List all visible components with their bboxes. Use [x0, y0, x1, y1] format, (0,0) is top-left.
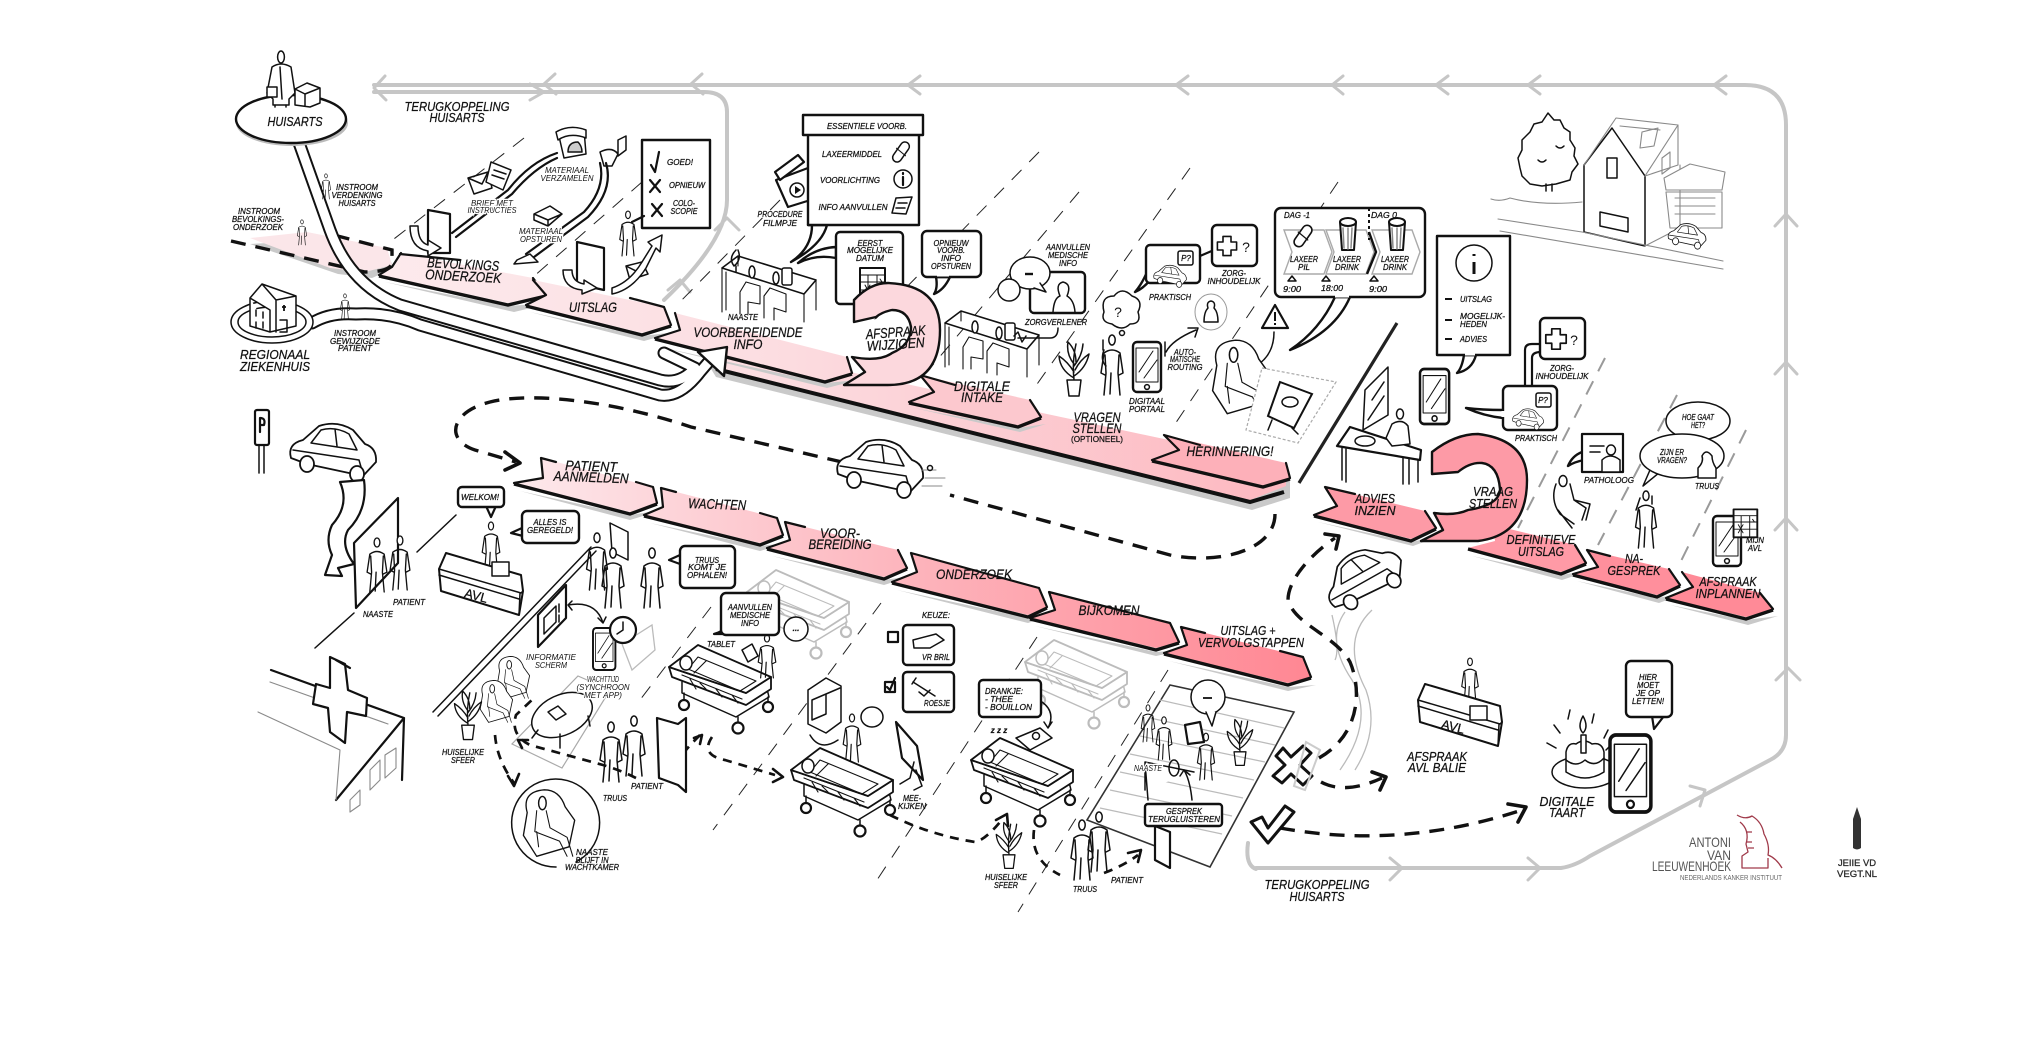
step: bevolkingsonderzoek: [379, 253, 552, 312]
icon: door 2: [577, 242, 604, 290]
feedback loop line: [374, 74, 1800, 880]
laxeer schedule box: DRINK: [1383, 263, 1408, 272]
arrow into door: [410, 226, 441, 256]
icon: tree: [1518, 113, 1578, 191]
bubble: eerst mogelijke datum: MOGELIJKE: [847, 246, 894, 255]
terugkoppeling huisarts bottom: TERUGKOPPELING: [1264, 877, 1370, 892]
route roads from huisarts and ziekenhuis: [298, 140, 727, 395]
instroom labels: INSTROOM: [336, 183, 378, 192]
icon: hospital building: [250, 284, 296, 332]
scene labels bevolking: MATERIAAL: [519, 227, 563, 236]
step: na-gesprek: NA-: [1625, 551, 1644, 566]
bubble: drankje: [979, 680, 1052, 728]
regionaal ziekenhuis node: [231, 284, 313, 374]
truus and patient to room: PATIENT: [1111, 876, 1144, 885]
automatische routing: [1161, 294, 1227, 372]
essentiele voorbereiding box: [791, 115, 923, 262]
automatische routing: AUTO-: [1173, 348, 1196, 357]
plant huiselijke sfeer: SFEER: [994, 881, 1018, 890]
digitaal portaal phone: [1129, 342, 1165, 414]
step: bijkomen: [1030, 592, 1184, 656]
person with phone, bubbles, truus: HET?: [1691, 421, 1705, 430]
instroom labels: GEWIJZIGDE: [330, 337, 381, 346]
step: afspraak wijzigen loop arrow: WIJZIGEN: [866, 334, 926, 354]
praktisch and zorginhoudelijk boxes: ZORG-: [1221, 269, 1246, 278]
hospital building with cross: [258, 657, 404, 812]
scene labels bevolking: BRIEF MET: [471, 199, 514, 208]
naaste in wachtkamer circle: BLIJFT IN: [576, 856, 609, 865]
keuze vr bril / roesje: ROESJE: [924, 699, 951, 708]
heading: terugkoppeling huisarts top: [404, 99, 510, 125]
bubble: alles is geregeld: ALLES IS: [533, 518, 567, 527]
praktisch and zorginhoudelijk boxes: INHOUDELIJK: [1208, 277, 1261, 286]
step: afspraak wijzigen loop arrow: [844, 283, 940, 385]
digitale intake scene: AANVULLEN: [1045, 243, 1090, 252]
greeting people at door: [587, 523, 663, 608]
step: afspraak inplannen: [1666, 572, 1778, 625]
door to treatment: [657, 718, 686, 792]
person with phone and question: [1101, 291, 1140, 395]
meekijken monitor: MEE-: [903, 794, 921, 803]
person with phone and question: ?: [1114, 304, 1122, 320]
icon: envelope and letter: [468, 172, 492, 194]
step: advies inzien: [1314, 487, 1440, 546]
x and checkmark decisions: [1251, 742, 1320, 843]
step: na-gesprek: GESPREK: [1608, 563, 1662, 578]
praktisch and zorginhoudelijk boxes: PRAKTISCH: [1149, 293, 1191, 302]
essentiele voorbereiding box: ESSENTIELE VOORB.: [827, 122, 907, 131]
bed with nurse and tablet: [669, 593, 808, 734]
naaste in wachtkamer circle: NAASTE: [576, 848, 609, 857]
truus and patient walking: [600, 716, 664, 803]
instroom labels: VERDENKING: [332, 191, 382, 200]
bubble: welkom: [458, 487, 504, 517]
info phone and box: UITSLAG: [1460, 295, 1492, 304]
bubble: eerst mogelijke datum: DATUM: [856, 254, 884, 263]
icon: garage: [1664, 164, 1725, 228]
bubble: truus komt je ophalen: TRUUS: [695, 556, 720, 565]
laxeer schedule box: DRINK: [1335, 263, 1360, 272]
laxeer schedule box: 9:00: [1369, 285, 1388, 294]
step: herinnering: [1152, 435, 1290, 487]
naaste at table scene: NAASTE: [728, 313, 759, 322]
truus and patient to room: TRUUS: [1073, 885, 1098, 894]
essentiele voorbereiding box: VOORLICHTING: [820, 176, 880, 185]
heading: terugkoppeling huisarts top: HUISARTS: [430, 110, 485, 125]
instroom labels: INSTROOM: [334, 329, 376, 338]
bubble: opnieuw voorb info opsturen: INFO: [941, 254, 961, 263]
scene labels bevolking: SCOPIE: [670, 207, 698, 216]
process band 2: visit day: [514, 457, 1316, 691]
home desk with person: [1337, 367, 1421, 484]
praktisch and zorginhoudelijk boxes: P?: [1181, 254, 1191, 263]
person with phone, bubbles, truus: ZIJN ER: [1659, 448, 1684, 457]
scene labels bevolking: MATERIAAL: [545, 166, 589, 175]
bubble: truus komt je ophalen: OPHALEN!: [687, 571, 728, 580]
entrance glass door and people: PATIENT: [393, 598, 426, 607]
recovery bed with tray: z z z: [990, 726, 1007, 735]
digitale intake scene: ZORGVERLENER: [1024, 318, 1087, 327]
keuze vr bril / roesje: KEUZE:: [922, 611, 950, 620]
bevolkingsonderzoek scene: [410, 127, 710, 294]
laxeer schedule box: LAXEER: [1290, 255, 1318, 264]
naaste in wachtkamer circle: [512, 779, 619, 872]
scene labels bevolking: GOED!: [667, 158, 694, 167]
pathologist screen and patient: [1554, 434, 1634, 528]
step: voorbereiding: VOOR-: [820, 525, 860, 541]
truus and patient to room: [1071, 812, 1144, 894]
step: na-gesprek: [1573, 550, 1686, 603]
wachttijd phone and clock: [576, 617, 655, 700]
driving car top: [837, 440, 945, 498]
plant huiselijke sfeer: HUISELIJKE: [985, 873, 1028, 882]
step: voorbereiding: BEREIDING: [808, 536, 872, 552]
scene labels bevolking: OPSTUREN: [520, 235, 562, 244]
info phone and box: HEDEN: [1460, 320, 1487, 329]
bubble: hier moet je op letten: HIER: [1639, 673, 1657, 682]
icon: info: [894, 170, 912, 188]
treatment room machine, doctor, bed: [791, 678, 895, 836]
dashed walking routes: [495, 698, 783, 786]
consult door and sign: TERUGLUISTEREN: [1148, 815, 1220, 824]
house with tree and garage: [1491, 113, 1725, 269]
step: uitslag en vervolgstappen: [1164, 623, 1316, 691]
curved route letter to jar: [452, 153, 557, 237]
bubble: drankje: - BOUILLON: [985, 703, 1032, 712]
step: vragen stellen: VRAGEN: [1074, 409, 1121, 425]
step: vragen stellen: STELLEN: [1072, 420, 1122, 436]
bed with nurse and tablet: INFO: [741, 619, 759, 628]
bubble: drankje: DRANKJE:: [985, 687, 1023, 696]
icon: form: [892, 197, 912, 214]
logo jelle vd vegt pencil: VEGT.NL: [1837, 869, 1877, 879]
recovery bed with tray: [971, 726, 1075, 826]
laxeer schedule box: DAG 0: [1371, 211, 1398, 220]
step: voorbereidende info: [655, 313, 858, 388]
info phone and box: ADVIES: [1459, 335, 1488, 344]
meekijken monitor: KIJKEN: [898, 802, 926, 811]
icon: sample jar: [556, 127, 586, 158]
digitale taart cake: TAART: [1549, 805, 1586, 820]
huisarts node: [236, 51, 348, 146]
afspraak avl balie: AVL: [1440, 717, 1466, 737]
step: patient aanmelden: AANMELDEN: [553, 468, 630, 486]
zorg and praktisch boxes right: ?: [1570, 332, 1578, 348]
step: vragen stellen: (OPTIONEEL): [1071, 435, 1123, 444]
avl balie reception: [439, 522, 523, 615]
naaste at table scene: [722, 250, 816, 322]
regionaal ziekenhuis node: ZIEKENHUIS: [239, 359, 310, 374]
keuze vr bril / roesje: VR BRIL: [922, 653, 950, 662]
zorg and praktisch boxes right: INHOUDELIJK: [1536, 372, 1589, 381]
step: voorbereidende info: VOORBEREIDENDE: [694, 324, 803, 340]
icon: doctor: [267, 51, 295, 107]
logo antoni van leeuwenhoek: [1652, 815, 1783, 882]
plant: [1059, 342, 1089, 396]
digitale intake scene: MEDISCHE: [1048, 251, 1089, 260]
step: patient aanmelden: [514, 457, 662, 520]
meekijken monitor: [896, 722, 926, 811]
step: bevolkingsonderzoek: ONDERZOEK: [425, 266, 502, 286]
wavy entrance arrow: [325, 480, 365, 576]
laxeer schedule box: 18:00: [1321, 284, 1344, 293]
digitale taart cake: DIGITALE: [1540, 794, 1595, 809]
truus and patient walking: TRUUS: [603, 794, 628, 803]
digitale taart cake: [1540, 710, 1651, 820]
info phone and box: [1420, 236, 1510, 424]
bubble: drankje: - THEE: [985, 695, 1014, 704]
icon: small house: [295, 83, 320, 107]
wachttijd phone and clock: MET APP): [584, 691, 622, 700]
zorg and praktisch boxes right: ZORG-: [1549, 364, 1574, 373]
step: afspraak inplannen: AFSPRAAK: [1699, 574, 1758, 589]
car leaving and road: [1314, 532, 1413, 770]
bubble: hier moet je op letten: JE OP: [1635, 689, 1661, 698]
icon: door 1: [428, 210, 450, 253]
step: uitslag: [526, 280, 676, 341]
procedure filmpje clapperboard: PROCEDURE: [758, 210, 803, 219]
info phone and box: MOGELIJK-: [1460, 312, 1505, 321]
essentiele voorbereiding box: INFO AANVULLEN: [818, 203, 888, 212]
laxeer schedule box: DAG -1: [1284, 211, 1310, 220]
consult room: [1087, 680, 1294, 867]
zorg and praktisch boxes right: P?: [1538, 396, 1548, 405]
laxeer schedule box: [1275, 208, 1425, 350]
step: bevolkingsonderzoek: BEVOLKINGS: [427, 254, 500, 274]
step: onderzoek: ONDERZOEK: [936, 566, 1013, 582]
bubble: eerst mogelijke datum: [798, 232, 903, 304]
step: definitieve uitslag: UITSLAG: [1518, 544, 1564, 559]
mijn avl phone and calendar: AVL: [1747, 544, 1762, 553]
thin dashed zone lines: [315, 138, 1746, 912]
mijn avl phone and calendar: MIJN: [1746, 536, 1764, 545]
step: vraag stellen loop arrow: VRAAG: [1473, 484, 1513, 499]
praktisch and zorginhoudelijk boxes: [1135, 225, 1261, 302]
afspraak avl balie: AVL BALIE: [1407, 760, 1466, 775]
bubble: opnieuw voorb info opsturen: OPNIEUW: [934, 239, 970, 248]
step: advies inzien: INZIEN: [1354, 503, 1396, 518]
step: digitale intake: DIGITALE: [954, 378, 1011, 394]
step: uitslag en vervolgstappen: VERVOLGSTAPPEN: [1198, 635, 1305, 650]
person with phone, bubbles, truus: VRAGEN?: [1657, 456, 1687, 465]
automatische routing: MATISCHE: [1170, 355, 1200, 364]
warning triangle and reminder: [1213, 305, 1288, 414]
heading: terugkoppeling huisarts top: TERUGKOPPELING: [404, 99, 510, 114]
instroom labels: [232, 174, 382, 353]
consult door and sign: GESPREK: [1166, 807, 1203, 816]
informatie scherm: [526, 585, 606, 670]
icon: toilet: [600, 136, 626, 166]
automatische routing: ROUTING: [1168, 363, 1202, 372]
bubble: welkom: WELKOM!: [461, 493, 500, 502]
consult room: NAASTE: [1134, 764, 1163, 773]
dashed car route around: [456, 398, 1275, 558]
step: definitieve uitslag: [1468, 525, 1592, 580]
zorg and praktisch boxes right: [1466, 318, 1589, 443]
instroom labels: HUISARTS: [338, 199, 376, 208]
scene labels bevolking: INSTRUCTIES: [468, 206, 517, 215]
bed with nurse and tablet: MEDISCHE: [730, 611, 771, 620]
digitale intake scene: INFO: [1059, 259, 1077, 268]
afspraak avl balie: [1406, 658, 1502, 775]
wachttijd phone and clock: (SYNCHROON: [576, 683, 630, 692]
waiting room sofa with people: HUISELIJKE: [442, 748, 485, 757]
regionaal ziekenhuis node: REGIONAAL: [240, 347, 310, 362]
person with phone, bubbles, truus: TRUUS: [1695, 482, 1720, 491]
bubble: opnieuw voorb info opsturen: VOORB.: [937, 246, 965, 255]
bubble: opnieuw voorb info opsturen: OPSTUREN: [931, 262, 971, 271]
parked car: [290, 424, 376, 482]
step: vraag stellen loop arrow: [1421, 434, 1527, 541]
bubble: truus komt je ophalen: KOMT JE: [688, 563, 727, 572]
scene labels bevolking: [468, 158, 706, 244]
laxeer schedule box: 9:00: [1283, 285, 1302, 294]
procedure filmpje clapperboard: FILMPJE: [763, 219, 798, 228]
dashed routes lower: [890, 814, 1141, 875]
bubble: hier moet je op letten: [1626, 661, 1672, 729]
entrance glass door and people: [354, 498, 426, 619]
afspraak avl balie: AFSPRAAK: [1406, 749, 1468, 764]
bed with nurse and tablet: ...: [793, 624, 799, 633]
step: herinnering: HERINNERING!: [1186, 443, 1274, 459]
step: onderzoek: [892, 553, 1052, 623]
step: afspraak wijzigen loop arrow: AFSPRAAK: [864, 322, 927, 342]
icon: house: [1584, 118, 1680, 246]
step: vraag stellen loop arrow: STELLEN: [1469, 496, 1517, 511]
mijn avl phone and calendar: [1713, 509, 1764, 566]
bed with nurse and tablet: AANVULLEN: [727, 603, 772, 612]
informatie scherm: SCHERM: [535, 661, 567, 670]
scene labels bevolking: COLO-: [673, 199, 695, 208]
step: uitslag en vervolgstappen: UITSLAG +: [1220, 623, 1276, 638]
faded beds: [747, 570, 1129, 728]
person with phone, bubbles, truus: [1636, 402, 1730, 548]
process band 3: results: [1314, 434, 1778, 625]
digitale intake scene: [945, 243, 1090, 377]
essentiele voorbereiding box: LAXEERMIDDEL: [822, 150, 882, 159]
praktisch and zorginhoudelijk boxes: ?: [1242, 239, 1250, 255]
laxeer schedule box: PIL: [1298, 263, 1310, 272]
step: afspraak inplannen: INPLANNEN: [1696, 586, 1761, 601]
bubble: opnieuw voorb info opsturen: [922, 231, 981, 294]
logo antoni van leeuwenhoek: ANTONI: [1689, 834, 1731, 850]
logo antoni van leeuwenhoek: NEDERLANDS KANKER INSTITUUT: [1680, 875, 1783, 882]
step: advies inzien: ADVIES: [1354, 491, 1395, 506]
icon: package: [534, 206, 562, 226]
instroom labels: PATIENT: [338, 344, 373, 353]
laxeer schedule box: LAXEER: [1381, 255, 1409, 264]
bubble: hier moet je op letten: MOET: [1637, 681, 1660, 690]
step: digitale intake: INTAKE: [961, 389, 1004, 405]
waiting room sofa with people: SFEER: [451, 756, 475, 765]
process band 1: pre-visit: [231, 232, 1290, 510]
step: patient aanmelden: PATIENT: [565, 457, 619, 475]
rug with coffee table: [1246, 368, 1336, 443]
step: bijkomen: BIJKOMEN: [1078, 602, 1140, 618]
bubble: hier moet je op letten: LETTEN!: [1632, 697, 1665, 706]
coffee table with rug: [512, 676, 610, 768]
bubble: alles is geregeld: GEREGELD!: [527, 526, 574, 535]
avl balie reception: AVL: [463, 585, 490, 606]
truus and patient walking: PATIENT: [631, 782, 664, 791]
person with phone, bubbles, truus: HOE GAAT: [1682, 413, 1715, 422]
logo antoni van leeuwenhoek: VAN: [1707, 847, 1731, 863]
step: wachten: WACHTEN: [688, 495, 747, 513]
consult door and sign: [1145, 804, 1222, 868]
parking sign and car: [255, 410, 269, 473]
digitaal portaal phone: DIGITAAL: [1129, 397, 1165, 406]
logo jelle vd vegt pencil: JEIIE VD: [1838, 858, 1877, 868]
route toilet to package: [526, 163, 608, 260]
icon: pill: [891, 140, 911, 164]
naaste in wachtkamer circle: WACHTKAMER: [565, 863, 619, 872]
step: voorbereidende info: INFO: [734, 336, 763, 352]
instroom labels: INSTROOM: [238, 207, 280, 216]
step: definitieve uitslag: DEFINITIEVE: [1506, 532, 1576, 547]
huisarts node: HUISARTS: [268, 114, 323, 129]
procedure filmpje clapperboard: [758, 155, 817, 228]
checklist: [642, 140, 710, 228]
person pointing: [620, 211, 636, 256]
logo jelle vd vegt pencil: [1837, 807, 1877, 879]
step: wachten: [644, 488, 788, 551]
dashed decisions routes: [1280, 534, 1526, 836]
logo antoni van leeuwenhoek: LEEUWENHOEK: [1652, 858, 1731, 874]
bed with nurse and tablet: TABLET: [707, 640, 736, 649]
step: digitale intake: [909, 375, 1046, 432]
scene labels bevolking: OPNIEUW: [669, 181, 706, 190]
terugkoppeling huisarts bottom: [1264, 877, 1370, 904]
laxeer schedule box: LAXEER: [1333, 255, 1361, 264]
bubble: eerst mogelijke datum: EERST: [858, 239, 884, 248]
step: voorbereiding: [767, 522, 912, 585]
road and hedge: [1491, 198, 1723, 269]
envelope and arrow: [626, 262, 648, 280]
pathologist screen and patient: PATHOLOOG: [1584, 476, 1634, 485]
scene labels bevolking: VERZAMELEN: [540, 174, 594, 183]
instroom labels: BEVOLKINGS-: [232, 215, 284, 224]
entrance glass door and people: NAASTE: [363, 610, 394, 619]
step: uitslag: UITSLAG: [569, 299, 617, 315]
bubble: truus komt je ophalen: [669, 546, 735, 588]
bubble: alles is geregeld: [511, 511, 579, 543]
digitaal portaal phone: PORTAAL: [1129, 405, 1165, 414]
zorg and praktisch boxes right: PRAKTISCH: [1515, 434, 1557, 443]
terugkoppeling huisarts bottom: HUISARTS: [1290, 889, 1345, 904]
keuze vr bril / roesje: [885, 611, 954, 712]
informatie scherm: INFORMATIE: [526, 653, 577, 662]
plant huiselijke sfeer: [985, 822, 1028, 890]
wachttijd phone and clock: WACHTTIJD: [587, 675, 619, 684]
instroom labels: ONDERZOEK: [233, 223, 284, 232]
icon: sitting patient: [1554, 476, 1590, 528]
step: vragen stellen: [1071, 409, 1123, 444]
waiting room sofa with people: [442, 656, 530, 765]
